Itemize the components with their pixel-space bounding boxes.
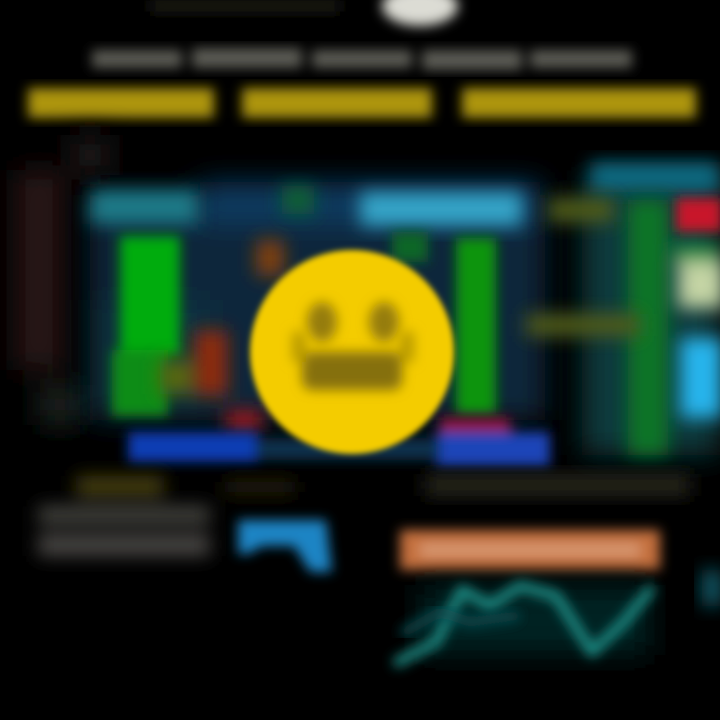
blue badge	[680, 338, 720, 418]
heading: grey overline	[92, 48, 632, 70]
face disc	[250, 250, 454, 454]
green column	[628, 200, 668, 455]
chart background	[90, 182, 545, 420]
green bar right	[392, 232, 496, 414]
chart header labels	[90, 186, 522, 226]
eyes	[307, 302, 399, 342]
line chart	[398, 585, 650, 662]
text block: lower centre caption	[425, 474, 690, 496]
panel: right side signals	[526, 162, 720, 455]
cream badge	[672, 244, 720, 308]
red badge	[676, 198, 720, 232]
text block: lower left	[38, 476, 295, 556]
left dark figure	[16, 135, 110, 425]
faint grid wash	[420, 585, 650, 655]
green bar left	[112, 236, 180, 416]
mouth	[292, 332, 414, 390]
secondary line	[405, 612, 515, 632]
side panel top band	[590, 162, 720, 192]
olive labels	[526, 198, 640, 336]
side panel background	[582, 180, 720, 455]
blue base band	[128, 418, 550, 466]
teal line	[398, 586, 650, 662]
top logo glow	[150, 0, 458, 26]
right edge teal mark	[702, 570, 720, 606]
red candles	[160, 240, 284, 432]
orange banner	[400, 530, 660, 570]
emoji face	[250, 250, 454, 454]
arrow: blue chevron	[238, 520, 332, 572]
panel: main chart	[90, 182, 550, 466]
heading: yellow title	[28, 88, 696, 118]
